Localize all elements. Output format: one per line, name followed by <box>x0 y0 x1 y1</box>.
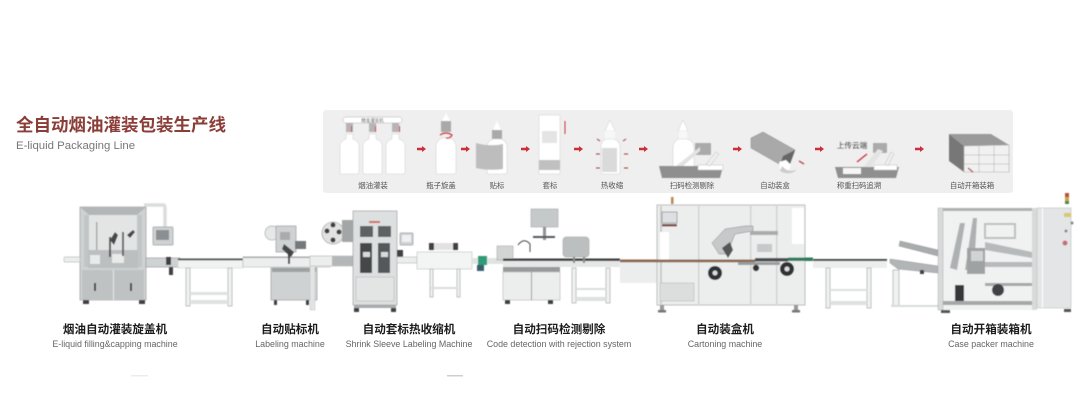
subtitle: E-liquid Packaging Line <box>16 140 135 152</box>
label: code detection: 扫码检测剔除 <box>670 181 715 190</box>
arrow 2 <box>461 146 470 152</box>
caption: filling machine: E-liquid filling&capping machine <box>52 339 178 349</box>
arrow 8 <box>915 146 924 152</box>
heat shrink tunnel <box>417 243 472 297</box>
label: weighing: 称重扫码追溯 <box>837 181 881 190</box>
caption: cartoning machine <box>688 322 762 349</box>
caption: case packer: 自动开箱装箱机 <box>950 322 1032 336</box>
caption: cartoning machine: 自动装盒机 <box>696 322 754 336</box>
arrow 1 <box>417 146 426 152</box>
step: heat shrink <box>596 120 628 174</box>
machine: cartoning <box>620 197 813 312</box>
step: capping <box>436 113 456 174</box>
step: labeling <box>476 121 507 174</box>
label: capping: 瓶子旋盖 <box>426 181 456 190</box>
caption: labeling machine: 自动贴标机 <box>261 322 319 336</box>
caption: shrink sleeve machine: 自动套标热收缩机 <box>363 322 456 336</box>
machine: case packer <box>890 193 1074 313</box>
caption: labeling machine <box>255 322 325 349</box>
arrow 6 <box>733 146 742 152</box>
step: weighing and tracing <box>835 140 899 178</box>
label: sleeve: 套标 <box>543 181 558 190</box>
step: e-liquid filling: 精准灌装机 <box>361 117 384 124</box>
label: case packing: 自动开箱装箱 <box>950 181 994 190</box>
arrow 3 <box>521 146 530 152</box>
caption: shrink sleeve machine: Shrink Sleeve Labeling Machine <box>346 339 472 349</box>
step: e-liquid filling <box>340 117 405 174</box>
label: labeling: 贴标 <box>490 181 505 190</box>
caption: code detection: 自动扫码检测剔除 <box>513 322 606 336</box>
caption: code detection <box>487 322 631 349</box>
panel: process steps <box>323 110 1013 193</box>
caption: case packer: Case packer machine <box>948 339 1034 349</box>
label: heat shrink: 热收缩 <box>601 181 624 190</box>
machine: labeling <box>243 226 330 305</box>
step: cartoning <box>751 132 804 173</box>
machine: filling and capping <box>64 205 180 304</box>
conveyor 1 <box>178 258 243 306</box>
step: weighing and tracing: 上传云端 <box>837 140 868 150</box>
label: filling: 烟油灌装 <box>358 181 388 190</box>
caption: cartoning machine: Cartoning machine <box>688 339 762 349</box>
conveyor 2 <box>813 259 887 308</box>
caption: code detection: Code detection with rejection system <box>487 339 631 349</box>
step: sleeve <box>539 115 566 174</box>
step: code detection <box>659 120 723 178</box>
machine: shrink sleeve labeling <box>310 211 417 312</box>
title: 全自动烟油灌装包装生产线 <box>16 115 226 135</box>
caption: filling machine <box>52 322 178 349</box>
caption: filling machine: 烟油自动灌装旋盖机 <box>63 322 168 336</box>
arrow 5 <box>639 146 648 152</box>
step: case packing <box>949 134 1009 172</box>
caption: case packer <box>948 322 1034 349</box>
arrow 4 <box>574 146 583 152</box>
label: cartoning: 自动装盒 <box>760 181 790 190</box>
caption: labeling machine: Labeling machine <box>255 339 325 349</box>
arrow 7 <box>815 146 824 152</box>
caption: shrink sleeve machine <box>346 322 472 349</box>
machine: code detection with rejection <box>472 209 620 304</box>
